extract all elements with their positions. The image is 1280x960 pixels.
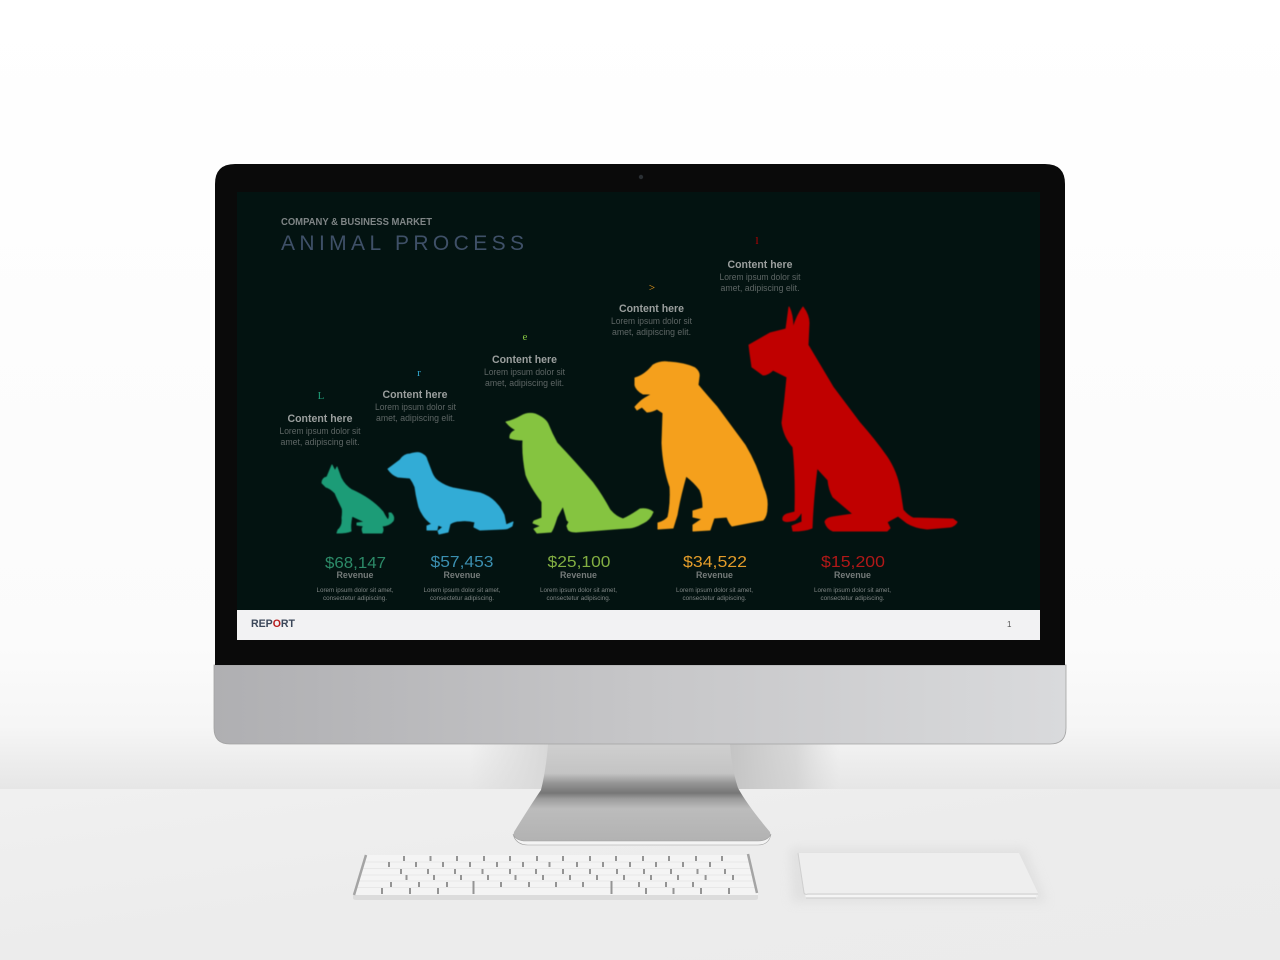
stat 2: Revenue (444, 570, 480, 580)
stat 1: Lorem ipsum dolor sit amet, (316, 587, 394, 594)
column 1 callout: Lorem ipsum dolor sit (280, 426, 361, 436)
stat 2 (424, 554, 501, 602)
stat 5 (814, 554, 891, 602)
stat 2: consectetur adipiscing. (430, 595, 494, 602)
column 2 callout: r (417, 367, 421, 379)
icon: blue dog (388, 453, 513, 534)
dog silhouettes (322, 307, 957, 534)
column 2 callout: Lorem ipsum dolor sit (375, 402, 456, 412)
stat 4: Lorem ipsum dolor sit amet, (676, 587, 753, 594)
column 4 callout: > (649, 282, 655, 294)
column 1 callout: Content here (288, 413, 352, 425)
monitor (214, 164, 1066, 744)
column 5 callout: l (755, 235, 759, 247)
slide eyebrow: COMPANY & BUSINESS MARKET (281, 217, 432, 228)
stat 1 (316, 555, 394, 602)
icon: red dog (749, 307, 957, 531)
report label: REPORT (251, 618, 295, 630)
column 5 callout: Content here (728, 259, 792, 271)
stat 1: Revenue (336, 570, 374, 580)
stand shadow (470, 744, 840, 789)
monitor bezel (215, 164, 1065, 665)
stat 3: consectetur adipiscing. (546, 595, 611, 602)
slide background (237, 192, 1040, 610)
column 4 callout: Content here (619, 303, 684, 315)
icon: green dog (322, 465, 394, 533)
stat 5: consectetur adipiscing. (820, 595, 885, 602)
stat 3: Lorem ipsum dolor sit amet, (540, 587, 617, 594)
keyboard (353, 854, 758, 900)
page number: 1 (1007, 620, 1012, 629)
column 2 callout (375, 367, 456, 423)
stat 4: consectetur adipiscing. (682, 595, 747, 602)
column 1 callout (280, 390, 361, 447)
column 4 callout: Lorem ipsum dolor sit (611, 316, 692, 326)
trackpad (790, 848, 1046, 902)
column 5 callout: Lorem ipsum dolor sit (720, 272, 801, 282)
column 2 callout: Content here (382, 389, 448, 401)
column 1 callout: amet, adipiscing elit. (280, 437, 360, 447)
column 1 callout: L (318, 390, 325, 402)
stat 3: Revenue (560, 570, 597, 580)
column 3 callout (484, 331, 565, 388)
stat 2: Lorem ipsum dolor sit amet, (424, 587, 501, 594)
stat 4 (676, 554, 753, 602)
stat 3: $25,100 (548, 554, 611, 571)
slide footer bar (237, 610, 1040, 640)
slide title: ANIMAL PROCESS (281, 232, 524, 255)
column 3 callout: Lorem ipsum dolor sit (484, 367, 565, 377)
stat 5: $15,200 (821, 554, 885, 571)
stat 4: Revenue (696, 570, 733, 580)
monitor stand (513, 744, 771, 845)
stat 4: $34,522 (683, 554, 747, 571)
icon: lime dog (506, 413, 653, 533)
stat 5: Lorem ipsum dolor sit amet, (814, 587, 891, 594)
stat 5: Revenue (834, 570, 871, 580)
column 3 callout: amet, adipiscing elit. (485, 378, 564, 388)
stat 1: consectetur adipiscing. (323, 595, 387, 602)
column 3 callout: Content here (492, 354, 557, 366)
icon: orange dog (635, 362, 767, 531)
column 4 callout (611, 282, 692, 337)
stat 3 (540, 554, 617, 602)
monitor chin (214, 665, 1066, 744)
column 3 callout: e (523, 331, 528, 343)
desk surface (0, 789, 1280, 960)
column 5 callout: amet, adipiscing elit. (720, 283, 800, 293)
stat 1: $68,147 (325, 555, 386, 572)
column 4 callout: amet, adipiscing elit. (612, 327, 691, 337)
stat 2: $57,453 (430, 554, 494, 571)
column 2 callout: amet, adipiscing elit. (376, 413, 455, 423)
camera (639, 175, 643, 179)
column 5 callout (720, 235, 801, 293)
